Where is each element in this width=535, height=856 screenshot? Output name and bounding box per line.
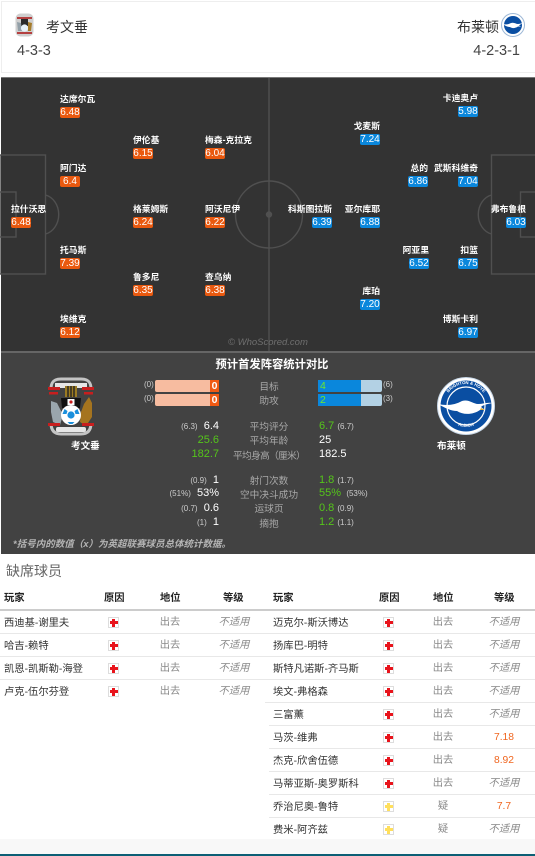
icon: Brighton crest: BRIGHTON & HOVE <box>446 381 486 393</box>
player: 博斯卡利: 6.97 <box>458 327 478 338</box>
row: 杰克-欣舍伍德: 8.92 <box>494 755 514 766</box>
player: 亚尔库耶: 亚尔库耶 <box>345 204 380 214</box>
column: player: 玩家 <box>4 593 25 604</box>
player: 拉什沃思: 6.48 <box>11 217 31 228</box>
row: 费米-阿齐兹: 疑 <box>438 824 448 834</box>
row: 乔治尼奥-鲁特: 7.7 <box>497 801 511 812</box>
row: 费米-阿齐兹: 不适用 <box>489 824 519 835</box>
row: 乔治尼奥-鲁特: 疑 <box>438 800 448 812</box>
row: 费米-阿齐兹: 费米-阿齐兹 <box>273 825 328 836</box>
player: 伊伦基 <box>133 135 160 159</box>
row: 西迪基-谢里夫: 西迪基-谢里夫 <box>4 618 69 629</box>
row: 哈吉-赖特: 哈吉-赖特 <box>4 641 49 652</box>
row: 迈克尔-斯沃博达: 迈克尔-斯沃博达 <box>273 618 349 629</box>
row: 杰克-欣舍伍德: 杰克-欣舍伍德 <box>273 756 338 767</box>
player: 拉什沃思 <box>11 204 46 228</box>
row: 凯恩-凯斯勒-海登: 出去 <box>160 662 180 674</box>
row: 杰克-欣舍伍德 <box>269 749 535 772</box>
player: 阿门达: 6.4 <box>63 176 77 187</box>
column: player: 玩家 <box>273 593 294 604</box>
home goals bar: 0 <box>212 380 217 392</box>
home value: tackles: (1) 1 <box>197 516 219 528</box>
away assists bar <box>318 394 382 406</box>
column: reason: 原因 <box>104 593 125 604</box>
player: 武斯科维奇: 武斯科维奇 <box>434 163 478 173</box>
player: 阿亚里: 阿亚里 <box>403 245 429 255</box>
player: 达席尔瓦: 6.48 <box>60 107 80 118</box>
player: 亚尔库耶: 6.88 <box>360 217 380 228</box>
home value: rating: (6.3) 6.4 <box>181 420 219 432</box>
home assists bar <box>155 394 219 406</box>
player: 查乌纳 <box>205 272 231 296</box>
home goals bar <box>155 380 219 392</box>
header: teams and formations <box>1 1 535 73</box>
stat: assists <box>144 394 393 406</box>
row: 迈克尔-斯沃博达: 不适用 <box>489 617 519 628</box>
icon: Coventry crest <box>48 378 94 436</box>
row: 三富薰: 出去 <box>433 708 453 720</box>
icon: Coventry small crest <box>16 14 34 36</box>
away assists bar: 2 <box>320 394 326 406</box>
player: 卡迪奥卢: 5.98 <box>458 106 478 117</box>
row: 哈吉-赖特: 出去 <box>160 640 180 650</box>
row: 马茨-维弗: 7.18 <box>494 732 514 743</box>
player: 武斯科维奇: 7.04 <box>458 176 478 187</box>
label: dribbles: 运球页 <box>254 504 284 514</box>
away goals bar <box>318 380 382 392</box>
label: average height: 平均身高（厘米） <box>233 450 305 462</box>
away formation: 4-2-3-1 <box>473 43 520 59</box>
player: 扣篮: 6.75 <box>458 258 478 269</box>
home team label: 考文垂 <box>71 440 100 452</box>
pitch markings <box>0 78 535 351</box>
footer band <box>0 839 535 856</box>
player: 查乌纳: 查乌纳 <box>205 272 231 282</box>
row: 埃文-弗格森: 不适用 <box>489 686 519 697</box>
player: 格莱姆斯: 6.24 <box>133 217 153 228</box>
player: 总的: 6.86 <box>408 176 428 187</box>
row: 乔治尼奥-鲁特 <box>269 795 535 818</box>
player: 梅森-克拉克: 梅森-克拉克 <box>205 135 252 145</box>
row: 斯特凡诺斯-齐马斯 <box>265 657 535 680</box>
row: 扬库巴-明特: 扬库巴-明特 <box>273 641 328 652</box>
row: 西迪基-谢里夫: 不适用 <box>219 617 249 628</box>
player: 梅森-克拉克 <box>205 135 252 159</box>
player: 扣篮: 扣篮 <box>460 245 478 255</box>
label: goals: 目标 <box>259 382 279 393</box>
row: 扬库巴-明特 <box>265 634 535 657</box>
player: 托马斯: 7.39 <box>60 258 80 269</box>
player: 总的 <box>408 163 428 187</box>
watermark: © WhoScored.com <box>228 337 308 348</box>
player: 戈麦斯: 戈麦斯 <box>354 121 380 131</box>
row: 扬库巴-明特: 出去 <box>433 640 453 650</box>
player: 查乌纳: 6.38 <box>205 285 225 296</box>
home assists bar: 0 <box>212 394 217 406</box>
player: 阿门达 <box>60 163 86 187</box>
player: 托马斯 <box>60 245 86 269</box>
player: 博斯卡利: 博斯卡利 <box>443 314 478 324</box>
row: 三富薰: 三富薰 <box>273 710 304 721</box>
player: 科斯图拉斯: 6.39 <box>312 217 332 228</box>
row: 扬库巴-明特: 不适用 <box>489 640 519 651</box>
home value: shots: (0.9) 1 <box>190 474 219 486</box>
row: 哈吉-赖特: 不适用 <box>219 640 249 651</box>
panel: lineup stats comparison <box>1 351 535 554</box>
row: 乔治尼奥-鲁特: 乔治尼奥-鲁特 <box>273 802 338 813</box>
player: 科斯图拉斯 <box>288 204 332 228</box>
player: 阿沃尼伊: 阿沃尼伊 <box>205 204 240 214</box>
row: 卢克-伍尔芬登: 出去 <box>160 686 180 696</box>
player: 扣篮 <box>458 245 478 269</box>
row: 埃文-弗格森 <box>265 680 535 703</box>
home value: age: 25.6 <box>198 434 219 446</box>
heading: missing players: 缺席球员 <box>6 563 62 579</box>
player: 弗布鲁根: 弗布鲁根 <box>491 204 526 214</box>
row: 斯特凡诺斯-齐马斯: 不适用 <box>489 663 519 674</box>
player: 阿沃尼伊 <box>205 204 240 228</box>
row: 马蒂亚斯-奥罗斯科: 马蒂亚斯-奥罗斯科 <box>273 779 359 790</box>
player: 鲁多尼: 6.35 <box>133 285 153 296</box>
away goals bar: 4 <box>320 380 326 392</box>
player: 弗布鲁根: 6.03 <box>506 217 526 228</box>
away value: rating: 6.7 (6.7) <box>319 420 354 432</box>
table: away missing players <box>265 611 535 840</box>
player: 伊伦基: 伊伦基 <box>133 135 159 145</box>
heading: stats comparison: 预计首发阵容统计对比 <box>216 359 328 371</box>
row: 马蒂亚斯-奥罗斯科: 出去 <box>433 778 453 788</box>
icon: Brighton crest <box>437 377 495 435</box>
label: tackles: 摘抱 <box>259 518 279 530</box>
label: assists: 助攻 <box>259 396 279 407</box>
away value: shots: 1.8 (1.7) <box>319 474 354 486</box>
row: 马茨-维弗 <box>269 726 535 749</box>
home assists average: (0) <box>144 394 154 403</box>
label: shots on target: 射门次数 <box>250 476 288 486</box>
row: 埃文-弗格森: 埃文-弗格森 <box>273 687 328 698</box>
player: 科斯图拉斯: 科斯图拉斯 <box>288 204 332 214</box>
player: 阿门达: 阿门达 <box>60 163 86 173</box>
home team name: 考文垂 <box>46 19 88 35</box>
player: 埃维克 <box>60 314 86 338</box>
player: 阿沃尼伊: 6.22 <box>205 217 225 228</box>
player: 阿亚里 <box>403 245 429 269</box>
player: 阿亚里: 6.52 <box>409 258 429 269</box>
home players <box>11 94 252 338</box>
player: 库珀: 7.20 <box>360 299 380 310</box>
row: 三富薰: 不适用 <box>489 709 519 720</box>
away team name: 布莱顿 <box>457 19 499 35</box>
away goals average: (6) <box>383 380 393 389</box>
player: 亚尔库耶 <box>345 204 380 228</box>
row: 卢克-伍尔芬登 <box>0 680 268 703</box>
row: 迈克尔-斯沃博达 <box>265 611 535 634</box>
row: 马茨-维弗: 出去 <box>433 732 453 742</box>
home goals average: (0) <box>144 380 154 389</box>
label: average age: 平均年龄 <box>250 436 288 446</box>
label: average rating: 平均评分 <box>250 422 288 432</box>
row: 卢克-伍尔芬登: 卢克-伍尔芬登 <box>4 687 69 698</box>
player: 梅森-克拉克: 6.04 <box>205 148 225 159</box>
home value: aerials: (51%) 53% <box>170 487 219 499</box>
away value: aerials: 55% (53%) <box>319 487 368 499</box>
away players <box>288 93 526 338</box>
footnote: *括号内的数值（x）为英超联赛球员总体统计数据。 <box>13 539 231 550</box>
player: 埃维克: 6.12 <box>60 327 80 338</box>
away assists average: (3) <box>383 394 393 403</box>
player: 卡迪奥卢: 卡迪奥卢 <box>443 93 478 103</box>
player: 总的: 总的 <box>410 163 428 173</box>
player: 戈麦斯: 7.24 <box>360 134 380 145</box>
player: 库珀 <box>360 286 380 310</box>
player: 伊伦基: 6.15 <box>133 148 153 159</box>
row: 凯恩-凯斯勒-海登: 不适用 <box>219 663 249 674</box>
player: 博斯卡利 <box>443 314 478 338</box>
away value: height: 182.5 <box>319 448 347 460</box>
away value: dribbles: 0.8 (0.9) <box>319 502 354 514</box>
row: 哈吉-赖特 <box>0 634 268 657</box>
row: 三富薰 <box>269 703 535 726</box>
player: 武斯科维奇 <box>434 163 478 187</box>
row: 杰克-欣舍伍德: 出去 <box>433 754 453 766</box>
away value: age: 25 <box>319 434 331 446</box>
home formation: 4-3-3 <box>17 43 51 59</box>
home value: dribbles: (0.7) 0.6 <box>181 502 219 514</box>
home value: height: 182.7 <box>191 448 219 460</box>
row: 迈克尔-斯沃博达: 出去 <box>433 616 453 628</box>
player: 鲁多尼: 鲁多尼 <box>133 272 159 282</box>
row: 卢克-伍尔芬登: 不适用 <box>219 686 249 697</box>
player: 库珀: 库珀 <box>362 286 380 296</box>
player: 达席尔瓦 <box>60 94 95 118</box>
table: home missing players <box>0 611 268 703</box>
row: 凯恩-凯斯勒-海登 <box>0 657 268 680</box>
away value: tackles: 1.2 (1.1) <box>319 516 354 528</box>
player: 达席尔瓦: 达席尔瓦 <box>60 94 95 104</box>
player: 弗布鲁根 <box>491 204 526 228</box>
column: position: 地位 <box>160 593 181 604</box>
icon: Brighton crest: ALBION <box>458 422 474 427</box>
row: 马蒂亚斯-奥罗斯科 <box>269 772 535 795</box>
player: 戈麦斯 <box>354 121 380 145</box>
label: aerials won: 空中决斗成功 <box>240 490 298 500</box>
row: 费米-阿齐兹 <box>269 818 535 841</box>
row: 西迪基-谢里夫: 出去 <box>160 616 180 628</box>
stat: goals <box>144 380 393 392</box>
row: 马蒂亚斯-奥罗斯科: 不适用 <box>489 778 519 789</box>
row: 西迪基-谢里夫 <box>0 611 268 634</box>
player: 卡迪奥卢 <box>443 93 478 117</box>
player: 格莱姆斯: 格莱姆斯 <box>133 204 168 214</box>
player: 鲁多尼 <box>133 272 159 296</box>
row: 马茨-维弗: 马茨-维弗 <box>273 733 318 744</box>
table header: away <box>0 0 535 1</box>
icon: Brighton small crest <box>501 13 525 37</box>
panel: pitch <box>1 77 535 352</box>
away team label: 布莱顿 <box>437 440 466 452</box>
column: rating: 等级 <box>494 593 515 604</box>
table header: home <box>0 0 268 1</box>
row: 埃文-弗格森: 出去 <box>433 686 453 696</box>
column: rating: 等级 <box>223 593 244 604</box>
player: 拉什沃思: 拉什沃思 <box>11 204 46 214</box>
player: 托马斯: 托马斯 <box>60 245 86 255</box>
player: 格莱姆斯 <box>133 204 168 228</box>
row: 凯恩-凯斯勒-海登: 凯恩-凯斯勒-海登 <box>4 664 83 675</box>
row: 斯特凡诺斯-齐马斯: 斯特凡诺斯-齐马斯 <box>273 664 359 675</box>
column: position: 地位 <box>433 593 454 604</box>
player: 埃维克: 埃维克 <box>60 314 86 324</box>
row: 斯特凡诺斯-齐马斯: 出去 <box>433 662 453 674</box>
column: reason: 原因 <box>379 593 400 604</box>
